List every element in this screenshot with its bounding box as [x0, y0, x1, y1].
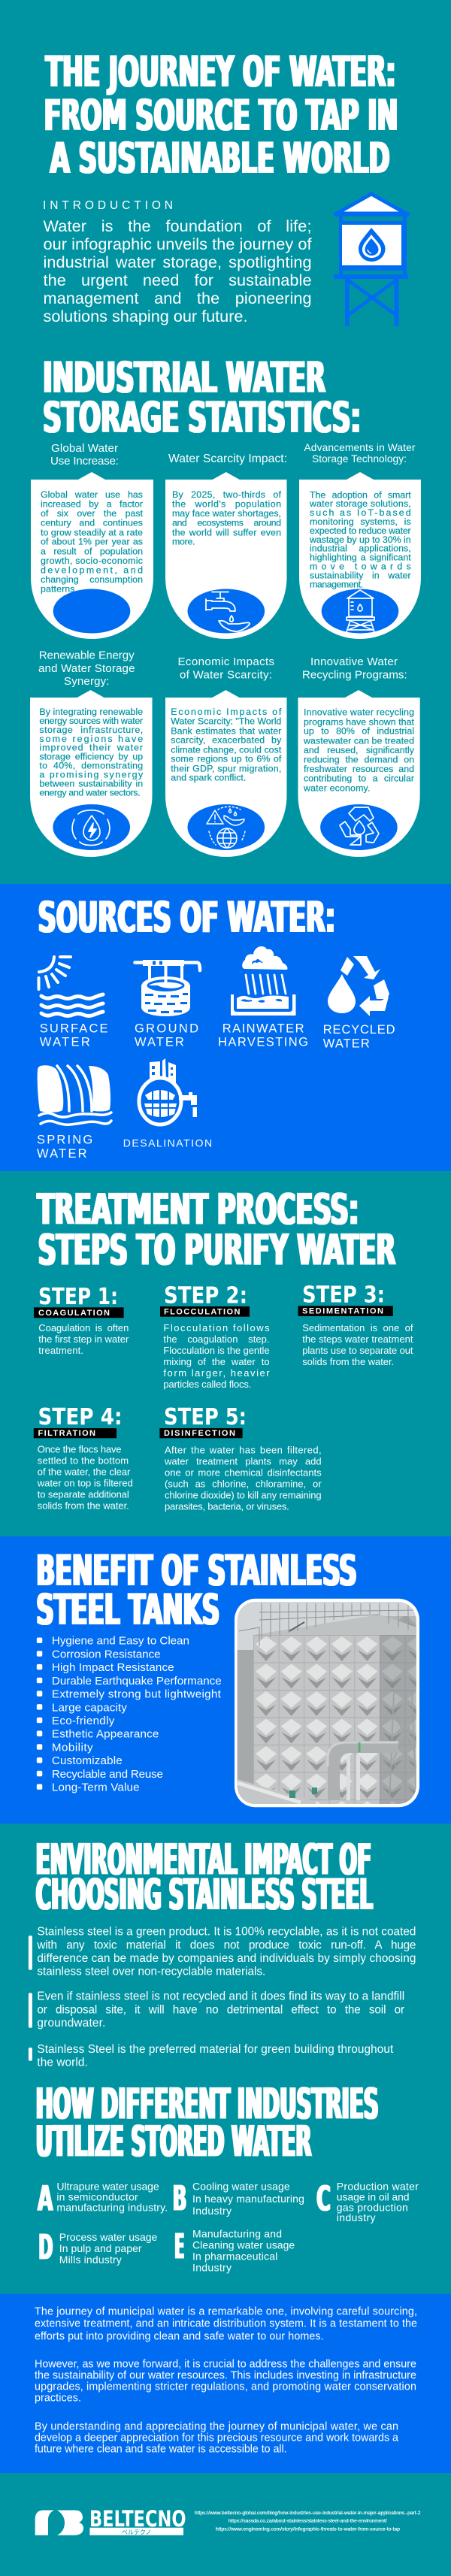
card shape: [165, 690, 287, 857]
card: advancements in storage technology: [299, 442, 421, 639]
paragraph 3: future where clean and safe water is accessible to all.: [35, 2444, 287, 2456]
letter: C: [316, 2178, 331, 2219]
description: usage in oil and: [337, 2190, 410, 2202]
label: WATER: [37, 1147, 87, 1161]
card text: of six over the past: [41, 508, 144, 519]
paragraph 3: [35, 2421, 398, 2456]
letter: B: [173, 2178, 186, 2219]
card text: industrial applications,: [310, 543, 411, 554]
step label bar: [34, 1428, 117, 1438]
card text: By 2025, two-thirds of: [172, 489, 282, 500]
description: industry: [337, 2211, 376, 2223]
icon: city, globe and tap: [139, 1058, 197, 1125]
card text: the world will suffer even: [172, 527, 281, 537]
description: In heavy manufacturing: [192, 2193, 304, 2205]
step text: After the water has been filtered,: [165, 1445, 322, 1456]
step text: one or more chemical disinfectants: [165, 1467, 322, 1479]
step 1: [34, 1284, 129, 1356]
introduction text: INTRODUCTION: [43, 199, 173, 212]
step label bar: [160, 1306, 250, 1317]
card heading: Innovative Water: [310, 655, 398, 668]
step title: STEP 1:: [38, 1284, 118, 1310]
source: desalination: [123, 1058, 212, 1149]
card text: [309, 489, 411, 589]
description: Production water: [337, 2180, 419, 2192]
card text: Bank estimates that water: [171, 725, 281, 736]
step text: treatment.: [38, 1345, 83, 1356]
card heading: Economic Impacts: [177, 655, 274, 668]
card text: to grow steadily at a rate: [41, 527, 143, 537]
icon: tap and hand: [187, 589, 265, 633]
paragraph 3: develop a deeper appreciation for this precious resource and work towards a: [35, 2432, 398, 2444]
card shape: [165, 472, 287, 639]
step 3: SEDIMENTATION: [302, 1307, 383, 1316]
card text: highlighting a significant: [310, 552, 411, 563]
card text: patterns: [41, 583, 75, 594]
accent bar: [29, 2048, 32, 2061]
card text: sustainability in water: [310, 571, 411, 581]
card text: Global water use has: [41, 489, 143, 500]
card text: such as IoT-based: [310, 507, 411, 518]
card text: move towards: [310, 562, 411, 572]
step text: mixing of the water to: [163, 1356, 270, 1367]
icon: waterfall: [38, 1065, 111, 1125]
description: Cleaning water usage: [192, 2239, 295, 2251]
benefits list: Customizable: [52, 1754, 123, 1767]
references: [195, 2511, 421, 2532]
step text: [164, 1445, 322, 1512]
card heading: Renewable Energy: [39, 649, 135, 662]
icon: warning, hand and globe: [187, 804, 265, 850]
card heading: [304, 442, 416, 465]
card shape: [299, 472, 421, 639]
logo: Beltecno: [35, 2506, 186, 2535]
paragraph 1: [35, 2305, 417, 2342]
step text: form larger, heavier: [163, 1367, 270, 1379]
card text: The adoption of smart: [310, 489, 411, 500]
card text: programs have shown that: [304, 716, 415, 727]
industry C: [316, 2178, 419, 2223]
card text: increased by a factor: [41, 499, 143, 510]
label: RAINWATER: [222, 1022, 304, 1035]
card text: [303, 707, 415, 793]
benefits list: [37, 1635, 222, 1794]
step text: Flocculation is the gentle: [163, 1345, 270, 1356]
card text: some regions up to 6% of: [171, 754, 282, 764]
description: In pulp and paper: [59, 2242, 142, 2254]
step 1: COAGULATION: [38, 1309, 110, 1318]
card heading: of Water Scarcity:: [180, 669, 272, 682]
step text: water treatment plants may add: [164, 1456, 322, 1467]
card text: [41, 489, 144, 594]
heading: [36, 1546, 357, 1635]
industry E: [174, 2226, 295, 2274]
label: WATER: [323, 1037, 370, 1050]
icon: sun and waves: [39, 957, 103, 1016]
panel background: [0, 2294, 451, 2473]
paragraph: landfill: or disposal site, it will have no detrimental effect to the soil or: [37, 2003, 404, 2016]
card heading: Storage Technology:: [312, 453, 407, 465]
introduction text: our infographic unveils the journey of: [44, 235, 312, 253]
heading: treatment process: [37, 1185, 395, 1276]
card text: water economy.: [303, 782, 370, 793]
label: [37, 1134, 92, 1161]
card heading: and Water Storage: [38, 662, 135, 675]
step text: particles called flocs.: [163, 1379, 251, 1390]
paragraph 2: the sustainability of our water resources. This includes investing in infrastructure: [35, 2370, 416, 2382]
card text: storage efficiency by up: [39, 752, 143, 762]
card heading: Recycling Programs:: [302, 669, 407, 682]
description: in semiconductor: [56, 2190, 138, 2202]
label: SPRING: [37, 1134, 92, 1147]
card heading: Use Increase:: [50, 455, 119, 468]
description: [192, 2228, 295, 2274]
references: https://www.beltecno-global.com/blog/how-industries-use-industrial-water-in-major-applications.-part-2: [195, 2511, 421, 2516]
heading: STEEL TANKS: [36, 1585, 219, 1635]
card text: water storage solutions,: [309, 498, 411, 509]
step text: Coagulation is often: [38, 1322, 129, 1333]
step text: parasites, bacteria, or viruses.: [165, 1501, 289, 1512]
description: [59, 2231, 158, 2266]
benefits list: Recyclable and Reuse: [52, 1768, 163, 1781]
label: [323, 1023, 395, 1050]
step text: water on top is filtered: [37, 1478, 133, 1489]
benefits list: Corrosion Resistance: [52, 1648, 161, 1660]
paragraph 1: efforts put into providing clean and safe water to our homes.: [35, 2330, 324, 2342]
paragraph: recyclable: [29, 1925, 416, 1978]
benefits list: Eco-friendly: [52, 1715, 115, 1727]
benefits list: Hygiene and Easy to Clean: [52, 1635, 189, 1648]
accent bar: [29, 1993, 32, 2028]
card shape: [298, 690, 420, 857]
card text: and reused, significantly: [304, 745, 415, 755]
icon: cloud, rain, basin: [231, 946, 296, 1016]
step text: plants use to separate out: [302, 1345, 413, 1356]
step 5: DISINFECTION: [164, 1429, 235, 1438]
paragraph: green building: [29, 2043, 394, 2069]
card text: to 40%, demonstrating: [39, 761, 143, 771]
icon: water tower outline: [322, 589, 398, 633]
step title: STEP 5:: [164, 1404, 247, 1430]
paragraph 2: [35, 2359, 416, 2405]
card text: Water Scarcity: "The World: [171, 716, 281, 727]
step text: chlorine dioxide) to kill any remaining: [165, 1490, 322, 1501]
introduction text: [43, 199, 312, 325]
benefits list: Large capacity: [52, 1701, 127, 1714]
step text: the steps water treatment: [302, 1333, 413, 1345]
heading: industries: [36, 2079, 379, 2166]
card text: growth, socio-economic: [41, 555, 143, 566]
step text: of the water, the clear: [38, 1467, 131, 1478]
heading: environmental impact: [36, 1835, 373, 1920]
step label bar: [34, 1307, 124, 1318]
card heading: Water Scarcity Impact:: [168, 453, 287, 465]
title: [44, 47, 398, 183]
paragraph: recyclable: Stainless steel is a green product. It is 100% recyclable, as it is not coated: [37, 1925, 416, 1938]
card heading: [38, 649, 135, 688]
paragraph: green building: Stainless Steel is the preferred material for green building throughout: [37, 2043, 394, 2056]
icon: well: [135, 960, 200, 1016]
paragraph: landfill: Even if stainless steel is not recycled and it does find its way to a landfill: [37, 1990, 404, 2002]
card text: and ecosystems around: [172, 518, 281, 528]
card heading: [50, 442, 119, 468]
references: https://sassda.co.za/about-stainless/stainless-steel-and-the-environment/: [229, 2519, 387, 2524]
card text: expected to reduce water: [310, 525, 411, 536]
paragraph 2: practices.: [35, 2393, 81, 2405]
description: Cooling water usage: [192, 2180, 290, 2192]
description: Manufacturing and: [192, 2228, 282, 2240]
icon: water tower: [334, 194, 410, 326]
card text: [39, 707, 144, 798]
paragraph: recyclable: difference can be made by companies and individuals by simply choosing: [37, 1952, 416, 1965]
card text: wastewater can be treated: [303, 735, 414, 746]
step 2: [160, 1282, 270, 1390]
icon: energy cycle drop: [53, 804, 130, 850]
letter: A: [38, 2178, 53, 2219]
label: HARVESTING: [218, 1036, 308, 1049]
step text: [163, 1322, 270, 1390]
benefits list: Esthetic Appearance: [52, 1728, 159, 1741]
industry B: [173, 2178, 304, 2219]
card text: between sustainability in: [39, 779, 143, 789]
card text: storage infrastructure,: [39, 725, 143, 735]
label: WATER: [135, 1036, 184, 1049]
card heading: Advancements in Water: [304, 442, 416, 453]
description: Mills industry: [59, 2254, 122, 2266]
paragraph 1: extensive treatment, and an intricate distribution system. It is a testament to the: [35, 2318, 417, 2330]
step title: STEP 3:: [302, 1282, 385, 1309]
card text: Economic Impacts of: [171, 707, 282, 717]
step text: to separate additional: [38, 1489, 129, 1500]
introduction text: Water is the foundation of life;: [44, 216, 311, 235]
introduction text: management and the pioneering: [44, 289, 311, 307]
card text: [171, 707, 282, 783]
card text: of about 1% per year as: [41, 537, 143, 547]
card text: their GDP, spur migration,: [171, 763, 281, 773]
card text: and spark conflict.: [171, 773, 246, 783]
panel: benefits of stainless steel tanks: [0, 1536, 451, 1824]
photo: stainless steel tank: [235, 1599, 419, 1807]
source: surface water: [39, 957, 108, 1049]
step title: STEP 2:: [164, 1282, 247, 1309]
step 4: [34, 1404, 133, 1512]
step text: Sedimentation is one of: [302, 1322, 413, 1333]
step text: [38, 1322, 129, 1356]
benefits list: Durable Earthquake Performance: [52, 1675, 222, 1688]
icon: recycle with drop: [320, 804, 398, 850]
paragraph: recyclable: stainless steel over non-recyclable materials.: [37, 1966, 265, 1978]
introduction text: industrial water storage, spotlighting: [44, 253, 311, 271]
card text: up to 80% of industrial: [304, 726, 414, 737]
card text: improved their water: [39, 743, 143, 753]
card shape: [30, 690, 152, 857]
source: ground water: [135, 960, 200, 1049]
source: spring water: [37, 1065, 111, 1161]
card: renewable energy synergy: [30, 649, 152, 857]
card text: century and continues: [41, 518, 143, 528]
paragraph: landfill: groundwater.: [37, 2017, 105, 2030]
card text: By integrating renewable: [39, 707, 143, 717]
card: global water use increase: [31, 442, 153, 639]
paragraph: recyclable: with any toxic material it does not produce toxic run-off. A huge: [36, 1939, 416, 1951]
benefits list: Mobility: [52, 1741, 93, 1754]
card text: [172, 489, 282, 547]
label: RECYCLED: [323, 1023, 395, 1037]
card text: development, and: [41, 565, 143, 575]
step text: Once the flocs have: [38, 1444, 121, 1455]
benefits list: High Impact Resistance: [52, 1661, 174, 1674]
description: [56, 2180, 168, 2214]
paragraph: landfill: [29, 1990, 404, 2030]
description: In pharmaceutical: [192, 2251, 277, 2263]
card text: reducing the demand on: [304, 755, 414, 765]
label: DESALINATION: [123, 1137, 212, 1149]
step text: the coagulation step.: [163, 1333, 270, 1345]
card: water scarcity impact: [165, 453, 287, 639]
paragraph 2: upgrades, implementing stricter regulations, and promoting water conservation: [35, 2381, 416, 2393]
description: [192, 2180, 304, 2217]
step text: solids from the water.: [302, 1356, 394, 1367]
step 2: FLOCCULATION: [164, 1307, 240, 1316]
card heading: Synergy:: [64, 675, 110, 688]
letter: D: [38, 2227, 53, 2268]
industry A: [38, 2178, 168, 2219]
step text: Flocculation follows: [163, 1322, 270, 1333]
introduction text: the urgent need for sustainable: [44, 271, 311, 289]
step title: STEP 4:: [38, 1404, 122, 1430]
card text: contributing to a circular: [304, 773, 414, 784]
step 5: [159, 1404, 322, 1512]
panel background: [0, 884, 451, 1171]
card text: may face water shortages,: [172, 508, 281, 519]
card shape: [31, 472, 153, 639]
card: innovative water recycling: [298, 655, 420, 857]
card text: wastage by up to 30% in: [309, 534, 411, 545]
card text: energy and water sectors.: [39, 787, 141, 798]
panel: sources of water: [0, 884, 451, 1171]
card text: more.: [172, 537, 195, 547]
paragraph 1: The journey of municipal water is a remarkable one, involving careful sourcing,: [35, 2305, 417, 2317]
panel: conclusion: [0, 2294, 451, 2473]
step text: [302, 1322, 413, 1367]
card text: energy sources with water: [39, 716, 143, 726]
card text: management.: [310, 579, 363, 589]
introduction text: solutions shaping our future.: [44, 307, 248, 325]
label: SURFACE: [40, 1022, 107, 1035]
step label bar: [298, 1306, 393, 1316]
label: [218, 1022, 308, 1049]
card text: some regions have: [39, 734, 143, 744]
card heading: [302, 655, 407, 682]
description: [337, 2180, 419, 2223]
logo: Beltecno: ベルテクノ: [122, 2529, 151, 2535]
paragraph 2: However, as we move forward, it is crucial to address the challenges and ensure: [35, 2359, 416, 2371]
step 3: [298, 1282, 413, 1367]
card text: Innovative water recycling: [304, 707, 414, 718]
card text: changing consumption: [41, 574, 143, 585]
heading: statistics: [43, 353, 361, 443]
card text: the world's population: [172, 499, 281, 510]
card text: monitoring systems, is: [310, 516, 411, 527]
paragraph 3: By understanding and appreciating the journey of municipal water, we can: [35, 2421, 398, 2433]
step 4: FILTRATION: [38, 1429, 95, 1438]
step text: settled to the bottom: [38, 1455, 129, 1467]
panel background: [0, 1536, 451, 1824]
label: WATER: [40, 1036, 90, 1049]
logo: Beltecno: BELTECNO: [89, 2506, 186, 2532]
card text: a result of population: [41, 546, 143, 556]
label: [40, 1022, 107, 1049]
references: https://www.engineering.com/story/infographic-threats-to-water-from-source-to-tap: [216, 2526, 400, 2532]
description: gas production: [337, 2201, 408, 2213]
description: manufacturing industry.: [56, 2202, 168, 2214]
industry D: [38, 2227, 158, 2268]
label: [135, 1022, 198, 1049]
step text: [37, 1444, 133, 1512]
card: economic impacts of water scarcity: [165, 655, 287, 857]
description: Industry: [192, 2262, 232, 2274]
paragraph: green building: the world.: [37, 2057, 88, 2069]
card text: a promising synergy: [39, 770, 144, 780]
step text: solids from the water.: [38, 1500, 129, 1512]
description: Industry: [192, 2205, 232, 2217]
card text: freshwater resources and: [304, 764, 414, 774]
benefits list: Long-Term Value: [52, 1781, 140, 1794]
card heading: [177, 655, 274, 682]
card heading: Global Water: [51, 442, 118, 455]
benefits list: Extremely strong but lightweight: [52, 1688, 222, 1701]
description: Process water usage: [59, 2231, 158, 2243]
label: GROUND: [135, 1022, 198, 1035]
card text: scarcity, exacerbated by: [171, 735, 282, 746]
source: recycled water: [323, 956, 395, 1050]
icon disc: [53, 589, 130, 633]
step label bar: [159, 1428, 243, 1438]
icon: recycle arrows and drop: [328, 956, 389, 1016]
source: rainwater harvesting: [218, 946, 308, 1049]
description: Ultrapure water usage: [56, 2180, 159, 2192]
card text: climate change, could cost: [171, 744, 282, 755]
industry E: E: [174, 2226, 184, 2267]
step text: (such as chlorine, chloramine, or: [165, 1479, 322, 1490]
accent bar: [29, 1936, 32, 1970]
step text: the first step in water: [38, 1333, 129, 1345]
